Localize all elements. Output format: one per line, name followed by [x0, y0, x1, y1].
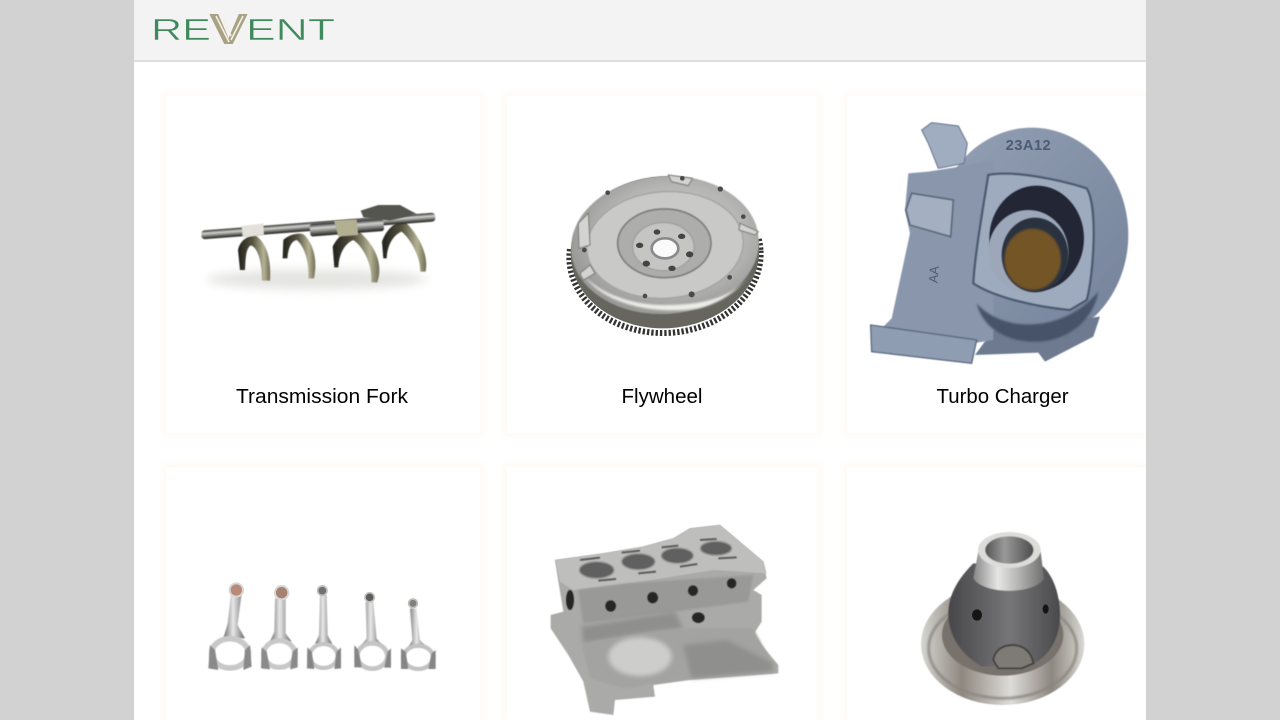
block silhouette [551, 525, 778, 715]
neck top [978, 532, 1041, 568]
rod 1 [208, 583, 252, 670]
logo: REVENT: RE [151, 12, 211, 47]
label: Transmission Fork: Transmission Fork [236, 386, 409, 408]
flange outline [973, 174, 1094, 310]
lower volute shadow [977, 292, 1098, 342]
shift rod [201, 213, 436, 239]
inner dark wall [1002, 218, 1068, 292]
rim band [583, 186, 747, 304]
base flange [871, 325, 977, 363]
product: differential housing [921, 532, 1084, 705]
cylinder bores [579, 541, 732, 578]
deck slots [580, 539, 737, 581]
upper boss [922, 123, 967, 168]
card: Turbo Charger [847, 96, 1146, 433]
flange ring lines [929, 598, 1077, 698]
fork 4 [382, 222, 426, 272]
product: turbo charger casting: AA [926, 265, 942, 284]
ring gear teeth [566, 238, 764, 336]
flange inner [942, 594, 1063, 676]
selector collar [334, 219, 358, 237]
bearing boss [683, 640, 773, 678]
selector block [242, 223, 264, 237]
left housing [880, 160, 993, 343]
deck face [555, 525, 767, 590]
illustrations and labels [154, 14, 1129, 716]
thick sleeve [310, 218, 384, 237]
card: Engine Block [507, 467, 818, 720]
label: Flywheel: Flywheel [622, 386, 702, 408]
fork shadow [207, 269, 427, 289]
ports [566, 578, 736, 623]
logo: REVENT [151, 5, 335, 54]
rod 4 [354, 593, 391, 669]
product: flywheel [565, 170, 765, 338]
card: Connecting Rods [166, 467, 480, 720]
card: Transmission Fork [166, 96, 480, 433]
rod 3 [307, 586, 341, 669]
product: turbo charger casting [871, 123, 1128, 363]
clutch mounting pads [578, 175, 758, 280]
fork 2 [283, 234, 315, 278]
casting marks: 23A12 [1006, 138, 1051, 154]
hub [633, 223, 694, 271]
inner ring [988, 210, 1068, 293]
page column [134, 0, 1146, 720]
mounting dots [582, 176, 746, 298]
volute body [935, 128, 1128, 342]
label: Turbo Charger: Turbo Charger [936, 386, 1069, 408]
flange [921, 583, 1084, 705]
lower boss [993, 645, 1033, 668]
header bar [134, 0, 1146, 62]
inner recess [618, 209, 711, 278]
card: Differential Housing [847, 467, 1146, 720]
side holes [972, 609, 982, 621]
bolt holes [636, 229, 693, 271]
product: engine block [551, 525, 778, 715]
card: Flywheel [507, 96, 818, 433]
side boss [906, 193, 953, 237]
outer disc [566, 170, 764, 320]
logo: REVENT: ENT [246, 12, 335, 47]
lower rim shade [567, 171, 763, 333]
lower web [582, 628, 773, 688]
product: connecting rods [208, 583, 436, 670]
middle shade band [578, 575, 753, 623]
upper mechanism [361, 205, 417, 221]
light patch [608, 637, 672, 676]
lower lug [975, 317, 1100, 362]
brown bore [1004, 229, 1061, 290]
rod 5 [401, 599, 436, 669]
centre bore [652, 238, 678, 258]
crankcase wall [582, 612, 683, 643]
logo: REVENT: V [209, 5, 249, 54]
neck collar [973, 552, 1044, 591]
bright lower crescent [583, 272, 752, 310]
bore [985, 536, 1033, 564]
dark housing [948, 563, 1060, 667]
fork 3 [333, 229, 379, 282]
dark opening [989, 186, 1084, 291]
fork 1 [238, 235, 270, 281]
product: transmission fork [201, 205, 436, 289]
rod 2 [261, 586, 298, 669]
